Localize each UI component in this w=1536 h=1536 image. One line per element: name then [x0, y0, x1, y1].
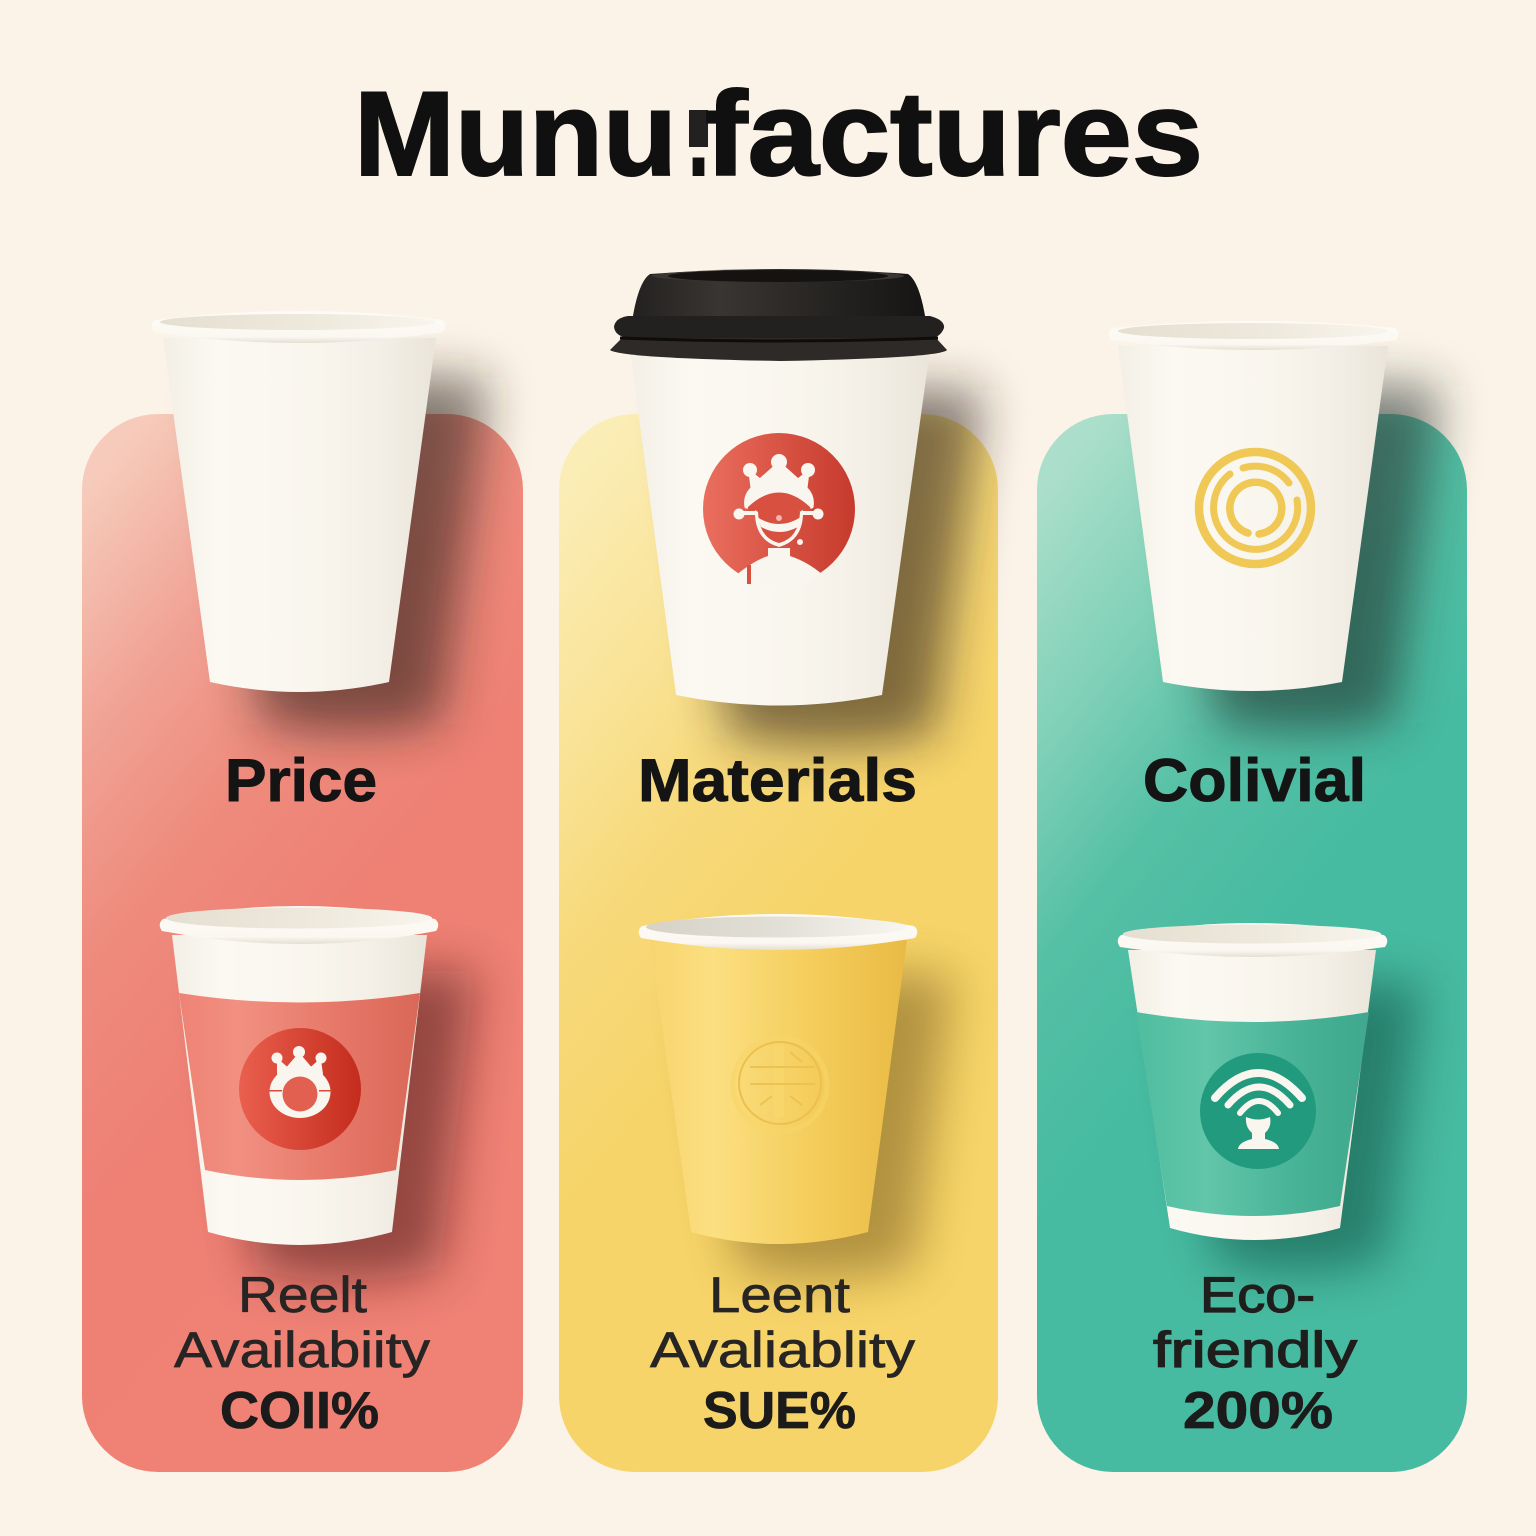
cup: solid yellow with embossed emblem — [639, 914, 953, 1278]
text block: colivial column: Eco- — [1200, 1267, 1315, 1323]
heading: Colivial: Colivial — [1143, 747, 1366, 814]
title: factures — [705, 67, 1203, 201]
title: Munu — [354, 67, 677, 201]
text block: materials column: Avaliablity — [650, 1322, 915, 1378]
title: : — [686, 67, 711, 201]
text block: colivial column: friendly — [1153, 1322, 1357, 1378]
icon: crown ring logo — [239, 1028, 361, 1150]
panel: materials column — [559, 414, 998, 1472]
heading: Price: Price — [225, 747, 377, 814]
text block: colivial column — [1153, 1267, 1357, 1440]
panel: colivial column — [1037, 414, 1467, 1472]
text block: materials column: SUE% — [703, 1382, 856, 1440]
title — [354, 67, 1203, 201]
text block: materials column — [650, 1267, 915, 1440]
icon: yellow concentric rings — [1199, 452, 1311, 564]
heading: Materials: Materials — [638, 747, 917, 814]
icon: black lid — [610, 269, 947, 361]
text block: price column: Reelt — [238, 1267, 367, 1323]
icon: red crown figure logo — [703, 433, 855, 600]
cup: green band with signal logo — [1118, 923, 1422, 1272]
panel: price column — [82, 414, 523, 1472]
text block: colivial column: 200% — [1183, 1382, 1333, 1440]
sleeve band — [1136, 1012, 1369, 1216]
cup: red band with crown ring logo — [160, 906, 475, 1281]
cup: plain white, price column — [152, 311, 488, 732]
text block: price column: Availabiity — [174, 1322, 430, 1378]
text block: price column — [174, 1267, 430, 1440]
text block: materials column: Leent — [709, 1267, 850, 1323]
icon: signal logo — [1200, 1053, 1316, 1169]
cup: black lid with crown logo, materials column — [610, 269, 982, 746]
cup: yellow ring logo, colivial column — [1109, 321, 1440, 731]
sleeve band — [179, 993, 420, 1180]
icon: embossed emblem — [733, 1038, 827, 1132]
text block: price column: COII% — [220, 1382, 379, 1440]
